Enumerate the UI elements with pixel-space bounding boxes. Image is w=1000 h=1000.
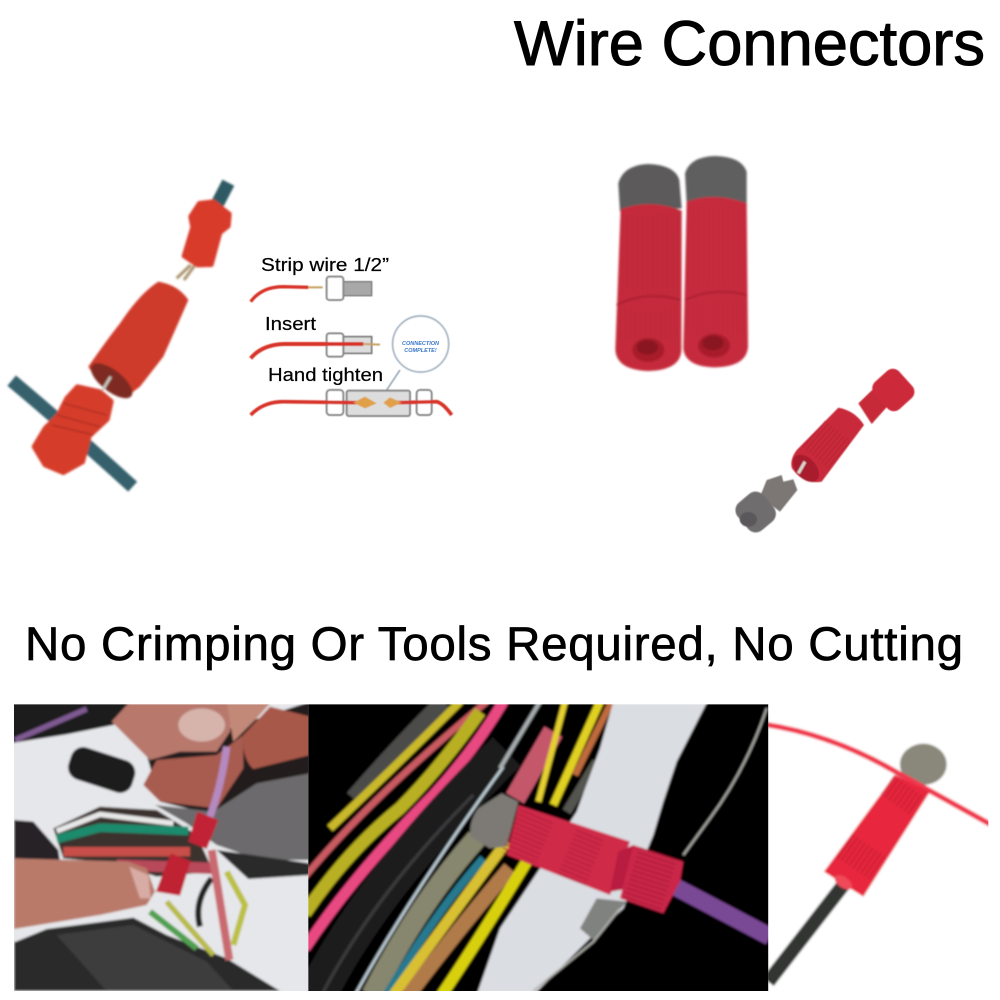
right lower ribs (687, 268, 745, 368)
grey insert (760, 475, 797, 512)
panel slot (66, 746, 137, 794)
step 2 stripped end (363, 341, 380, 348)
threaded insert (858, 385, 892, 424)
grey nut opening (740, 512, 757, 527)
upper right skin (227, 702, 272, 742)
red run wire (765, 724, 992, 825)
thumbnail (178, 708, 225, 742)
step 1 threads (343, 282, 372, 296)
left hole shadow (637, 340, 658, 355)
left lower ribs (620, 273, 678, 373)
green-yellow wire loop (227, 872, 245, 945)
dark gap behind fingers (147, 702, 310, 815)
purple background wire (15, 709, 87, 740)
thumb (112, 702, 233, 760)
left collar seam (617, 296, 681, 305)
connector body (88, 282, 188, 397)
photo: connector on wire bundle (305, 702, 772, 995)
orange wire (408, 868, 510, 995)
pink drop wire (212, 850, 229, 960)
label: hand tighten: Hand tighten (268, 365, 383, 385)
collar (610, 845, 633, 892)
callout text line two: COMPLETE! (404, 348, 437, 354)
body ribs right (572, 835, 590, 880)
upper red connector (188, 812, 218, 849)
lower fingernail (129, 867, 151, 898)
yellow wire upper left (538, 702, 565, 802)
label: strip wire: Strip wire 1/2” (261, 255, 389, 275)
step 1 wire (251, 287, 308, 302)
red end nut (869, 365, 918, 415)
yellow wire lower (393, 842, 507, 995)
yellow-green wire (305, 712, 480, 913)
white door frame (477, 702, 707, 995)
black wire (768, 885, 843, 982)
metal pin (102, 377, 111, 392)
left dark grommet (14, 820, 60, 865)
callout text: CONNECTION (402, 341, 440, 347)
lower red connector (156, 853, 191, 896)
black background (305, 702, 772, 995)
middle finger (143, 735, 243, 808)
illustration: connector assembly with wire (12, 183, 229, 487)
yellow wire far (442, 862, 527, 995)
grey strand upper (500, 702, 540, 768)
stripped strands (177, 265, 195, 280)
step 2 nut (327, 333, 343, 357)
label: insert: Insert (265, 314, 316, 334)
step 3 wires (251, 402, 452, 415)
step 3 housing body (347, 391, 410, 416)
body ribs (814, 434, 841, 456)
wire bundle backing (53, 807, 213, 877)
right collar seam (685, 292, 747, 300)
yellow wire upper right (553, 702, 600, 805)
body ribs left (518, 816, 537, 859)
right hole shadow (702, 336, 724, 350)
step diagram: strip, insert, hand tighten (251, 255, 452, 416)
product photo: two assembled connectors (615, 156, 748, 371)
red end nut (620, 845, 683, 913)
bottom wire (12, 381, 133, 487)
step 3 left nut (327, 390, 343, 415)
red main body (791, 408, 864, 482)
white background (765, 702, 992, 995)
bottom nut (34, 387, 111, 473)
title: Wire Connectors (514, 9, 985, 79)
lower body ribs (845, 846, 877, 868)
step 3 crimped contacts (353, 397, 402, 408)
photo: connector tapping red wire (765, 702, 992, 995)
body ribs (887, 785, 916, 805)
step 2 threads (343, 337, 372, 353)
body opening (85, 357, 138, 404)
black wire (317, 752, 507, 995)
right finger (243, 707, 310, 769)
black wire highlight (323, 795, 473, 992)
salmon wire (305, 702, 487, 877)
left body ribs (622, 133, 680, 373)
body face (788, 450, 824, 487)
lower dark trim (14, 918, 280, 991)
red connector body (824, 775, 930, 897)
top wire (213, 183, 228, 212)
right body ribs (688, 127, 745, 367)
white stripe wire (355, 767, 503, 995)
grey nut (731, 487, 780, 536)
nut thread ridges (52, 403, 107, 435)
orange wire upper (575, 702, 612, 775)
trim texture (57, 925, 233, 991)
nut ribs (642, 853, 658, 906)
right hole (698, 334, 730, 358)
dark top corner (14, 704, 130, 744)
left connector body (615, 204, 682, 371)
step 3 right nut (417, 390, 432, 415)
step 1 nut (327, 277, 343, 300)
door edge seam (533, 708, 767, 991)
lower finger (14, 858, 155, 929)
subheading: No Crimping Or Tools Required, No Cutting (25, 618, 963, 671)
white car panel (10, 702, 310, 995)
pink wire bundle (117, 865, 213, 868)
photo: hand connecting wires (10, 702, 310, 995)
white wire (57, 814, 173, 831)
shadow under foam (217, 850, 310, 879)
yellow wire (330, 702, 460, 828)
beige wire (372, 838, 477, 995)
right connector body (683, 197, 748, 367)
top nut (184, 202, 229, 265)
grey strand by door (567, 762, 597, 812)
product photo: exploded connector (731, 365, 918, 536)
step 2 wire (251, 344, 363, 358)
red wire (62, 845, 192, 858)
left hole (632, 338, 664, 362)
grey connector tip (470, 793, 518, 848)
pink wire (305, 702, 503, 948)
green wire (150, 912, 197, 948)
green wire (57, 828, 188, 839)
grey sleeve (353, 702, 443, 798)
foam strip (155, 773, 310, 860)
grey door shading (580, 898, 627, 940)
black wire loop (198, 878, 212, 927)
callout circle (393, 316, 449, 372)
purple wire (672, 885, 770, 937)
callout leader (387, 370, 400, 390)
wire entry (832, 872, 855, 892)
right connector cap (685, 156, 747, 205)
step 1 stripped end (308, 284, 323, 290)
metal pin (798, 462, 805, 473)
red connector body (507, 805, 630, 895)
purple wire (210, 747, 227, 817)
teal wire (387, 858, 483, 995)
yellow wire (167, 902, 213, 955)
step drawings (251, 277, 452, 416)
pink wire upper (515, 732, 553, 798)
left connector cap (618, 164, 682, 212)
grey cap (900, 744, 947, 785)
